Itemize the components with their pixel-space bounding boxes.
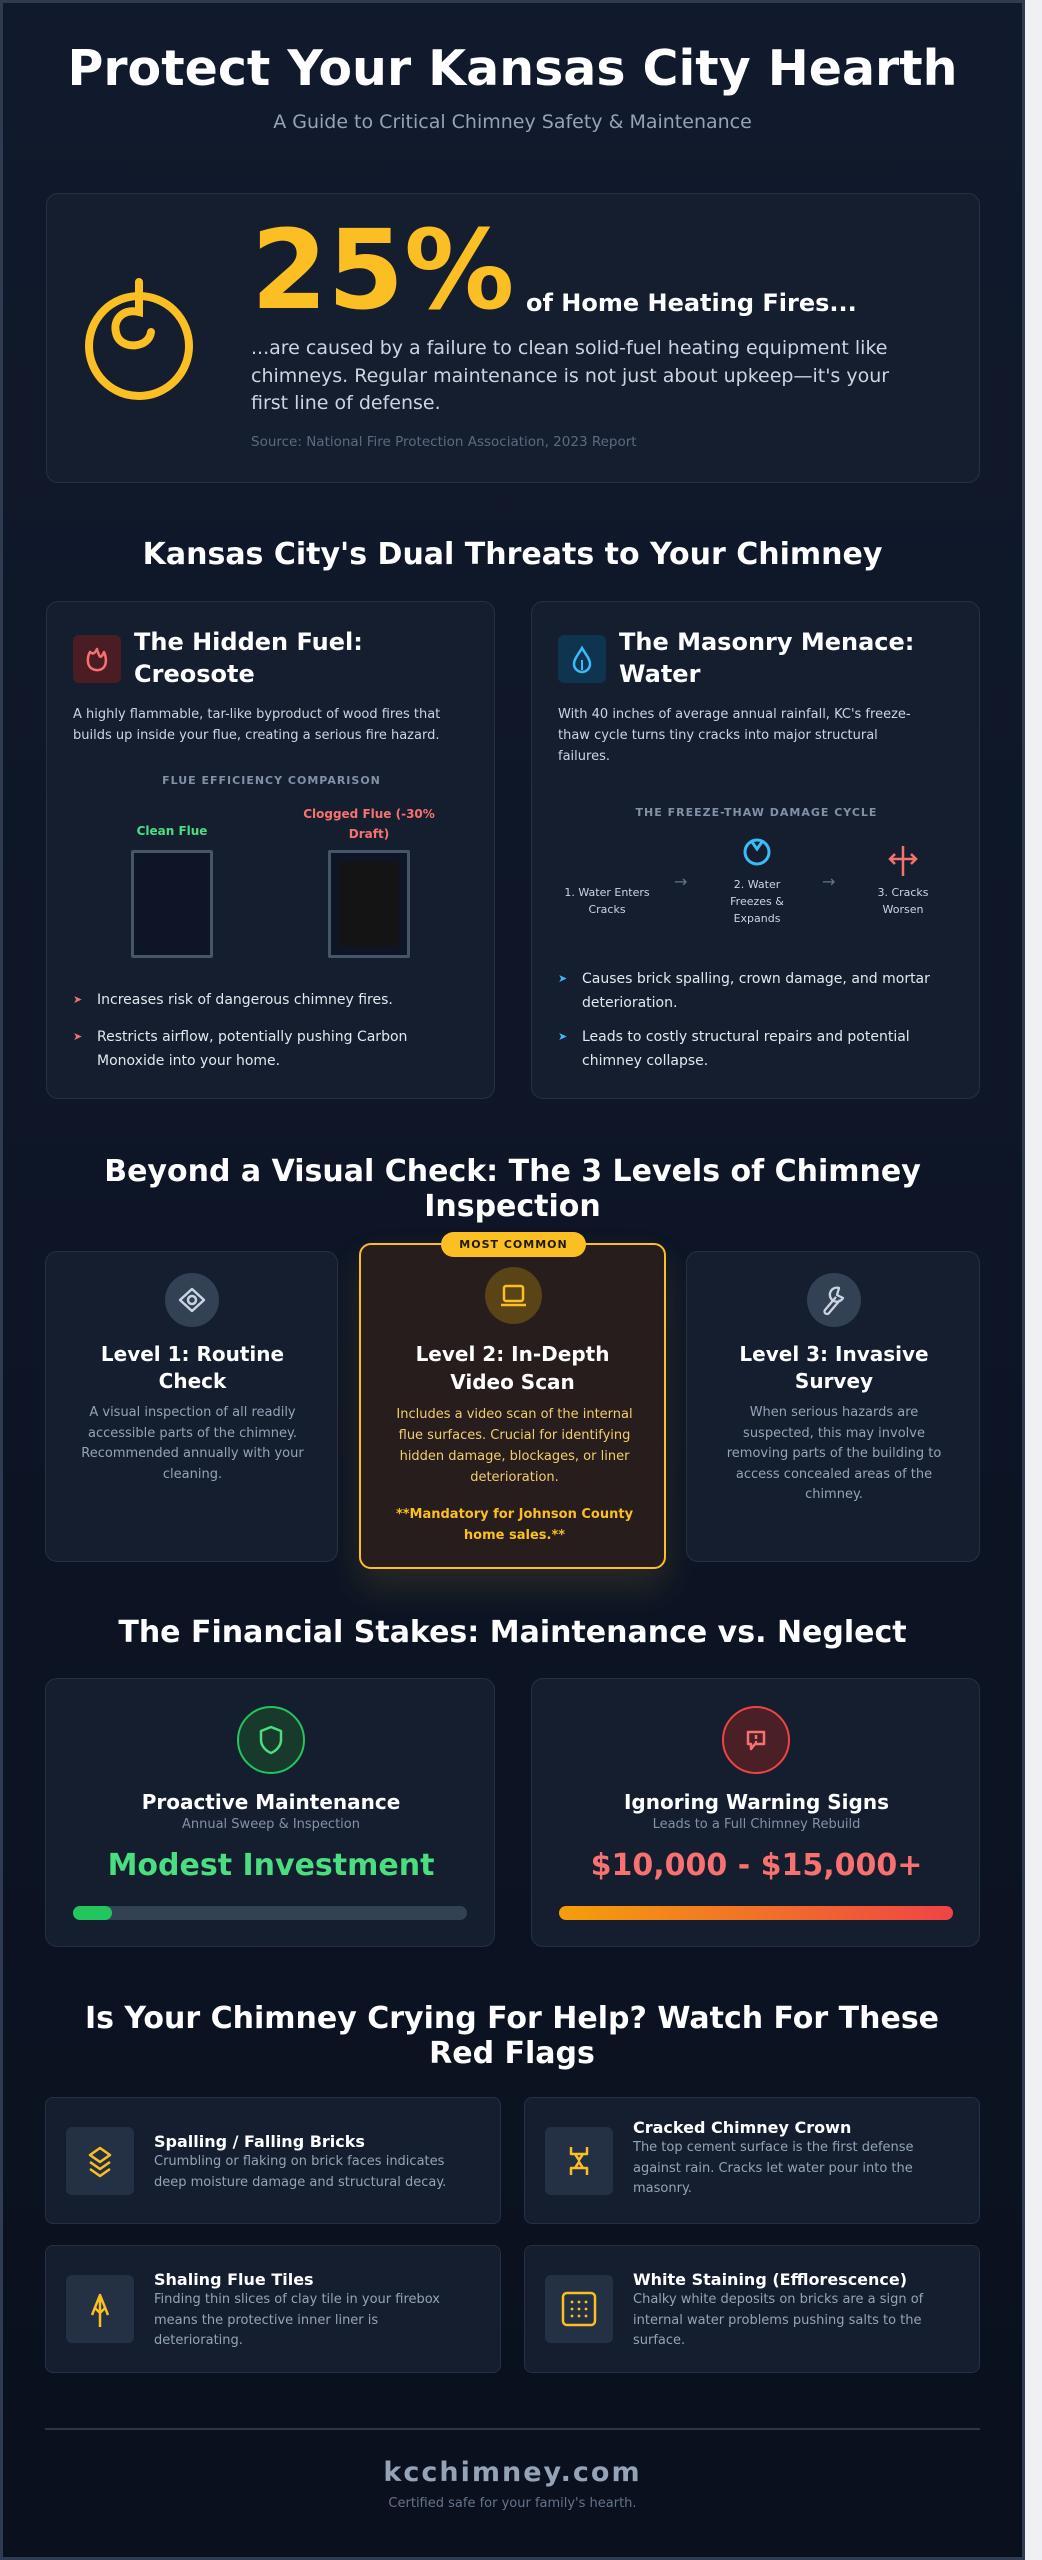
panel: efflorescence xyxy=(524,2245,980,2373)
diagram: freeze-thaw cycle: THE FREEZE-THAW DAMAGE CYCLE xyxy=(636,806,877,819)
panel: proactive maintenance xyxy=(45,1678,495,1947)
stat number: 25% xyxy=(251,206,514,334)
diagram: freeze-thaw cycle xyxy=(564,806,929,925)
panel: ignoring warning signs xyxy=(531,1678,980,1947)
text: White Staining (Efflorescence) xyxy=(633,2270,907,2289)
badge xyxy=(441,1232,586,1257)
panel: cracked crown xyxy=(524,2097,980,2224)
diagram: freeze-thaw cycle: 3. Cracks xyxy=(877,886,929,899)
text: Finding thin slices of clay tile in your firebox means the protective inner liner is deteriorating. xyxy=(154,2292,440,2348)
heading: Creosote xyxy=(134,660,255,688)
badge: MOST COMMON xyxy=(459,1238,568,1251)
bullet list: ➤ xyxy=(558,972,567,985)
bullet list xyxy=(73,992,407,1069)
title: Level 2: In-Depth Video Scan xyxy=(416,1342,609,1394)
icon: eye xyxy=(165,1273,219,1327)
diagram: freeze-thaw cycle: 2. Water xyxy=(734,878,780,891)
text: Cracked Chimney Crown xyxy=(633,2118,851,2137)
icon: layers xyxy=(66,2127,134,2195)
subtitle: A Guide to Critical Chimney Safety & Maintenance xyxy=(273,111,752,133)
text: Spalling / Falling Bricks xyxy=(154,2132,365,2151)
icon: alert bubble xyxy=(722,1706,790,1774)
diagram: freeze-thaw cycle: Freezes & xyxy=(730,895,784,908)
text xyxy=(154,2132,446,2190)
title: Ignoring Warning Signs xyxy=(624,1790,889,1814)
icon: flame xyxy=(73,635,121,683)
heading: inspection levels: Beyond a Visual Check: The 3 Levels of Chimney Inspection xyxy=(104,1154,921,1224)
source: Source: National Fire Protection Association, 2023 Report xyxy=(251,434,637,450)
icon: arrow up xyxy=(66,2275,134,2343)
heading: dual threats: Kansas City's Dual Threats to Your Chimney xyxy=(143,537,882,572)
heading: The Masonry Menace: xyxy=(619,628,914,656)
bar xyxy=(559,1906,953,1920)
footer: tagline: Certified safe for your family's hearth. xyxy=(388,2496,637,2511)
title: Level 3: Invasive Survey xyxy=(739,1342,929,1393)
panel: level 1 xyxy=(45,1251,338,1562)
text: The top cement surface is the first defense against rain. Cracks let water pour into the masonry. xyxy=(633,2140,914,2196)
subtitle: Leads to a Full Chimney Rebuild xyxy=(653,1817,860,1832)
bullet list xyxy=(558,971,930,1069)
bullet list: Leads to costly structural repairs and potential chimney collapse. xyxy=(582,1029,910,1069)
icon: shield xyxy=(237,1706,305,1774)
bullet list: ➤ xyxy=(73,1030,82,1043)
diagram: freeze-thaw cycle: → xyxy=(674,872,687,891)
panel: hero stat xyxy=(46,193,980,483)
text: Shaling Flue Tiles xyxy=(154,2270,314,2289)
subtitle: Annual Sweep & Inspection xyxy=(182,1817,360,1832)
description: When serious hazards are suspected, this may involve removing parts of the building to access concealed areas of the chimney. xyxy=(727,1405,941,1502)
chart: flue comparison: Clogged Flue (-30% Draft) xyxy=(303,807,435,841)
diagram: freeze-thaw cycle: Worsen xyxy=(883,903,923,916)
description: With 40 inches of average annual rainfall, KC's freeze-thaw cycle turns tiny cracks into major structural failures. xyxy=(558,707,911,764)
diagram: freeze-thaw cycle: Expands xyxy=(734,912,780,925)
bullet list: ➤ xyxy=(73,993,82,1006)
icon: laptop xyxy=(485,1267,542,1324)
icon: water drop xyxy=(558,635,606,683)
panel: spalling xyxy=(45,2097,501,2224)
diagram: freeze-thaw cycle: → xyxy=(822,872,835,891)
stat label: of Home Heating Fires... xyxy=(526,289,857,317)
heading: financial stakes: The Financial Stakes: Maintenance vs. Neglect xyxy=(118,1615,907,1650)
description: A visual inspection of all readily accessible parts of the chimney. Recommended annually with your cleaning. xyxy=(81,1405,304,1482)
panel: creosote xyxy=(46,601,495,1099)
title: Proactive Maintenance xyxy=(142,1790,400,1814)
bullet list: Causes brick spalling, crown damage, and mortar deterioration. xyxy=(582,971,930,1011)
value: $10,000 - $15,000+ xyxy=(591,1848,922,1883)
callout: mandatory: **Mandatory for Johnson County home sales.** xyxy=(396,1507,633,1543)
panel: level 2 xyxy=(359,1243,666,1569)
bar xyxy=(73,1906,467,1920)
bullet list: ➤ xyxy=(558,1030,567,1043)
text: Crumbling or flaking on brick faces indicates deep moisture damage and structural decay. xyxy=(154,2154,446,2190)
icon: crown xyxy=(545,2127,613,2195)
heading xyxy=(619,628,914,688)
chart: flue comparison: Clean Flue xyxy=(137,824,207,838)
footer: brand: kcchimney.com xyxy=(383,2457,642,2488)
heading: The Hidden Fuel: xyxy=(134,628,363,656)
icon: wrench xyxy=(807,1273,861,1327)
description: A highly flammable, tar-like byproduct of wood fires that builds up inside your flue, creating a serious fire hazard. xyxy=(73,707,440,743)
heading: red flags: Is Your Chimney Crying For Help? Watch For These Red Flags xyxy=(85,2001,939,2071)
panel: level 3 xyxy=(686,1251,980,1562)
bullet list: Increases risk of dangerous chimney fires. xyxy=(97,992,393,1008)
description: Includes a video scan of the internal flue surfaces. Crucial for identifying hidden damage, blockages, or liner deterioration. xyxy=(396,1407,633,1485)
stat description: ...are caused by a failure to clean solid-fuel heating equipment like chimneys. Regular maintenance is not just about upkeep—it's your first line of defense. xyxy=(251,337,889,414)
chart: flue comparison: FLUE EFFICIENCY COMPARISON xyxy=(162,774,381,787)
heading xyxy=(134,628,363,688)
title: Protect Your Kansas City Hearth xyxy=(67,40,958,97)
heading: Water xyxy=(619,660,700,688)
diagram: freeze-thaw cycle: 1. Water Enters Cracks xyxy=(564,886,650,916)
text: Chalky white deposits on bricks are a sign of internal water problems pushing salts to the surface. xyxy=(633,2292,923,2348)
title: Level 1: Routine Check xyxy=(101,1342,284,1393)
value: Modest Investment xyxy=(108,1848,434,1883)
panel: shaling flue tiles xyxy=(45,2245,501,2373)
icon: flame ring xyxy=(85,278,193,400)
icon: dotted tile xyxy=(545,2275,613,2343)
panel: water xyxy=(531,601,980,1099)
chart: flue comparison xyxy=(131,774,435,958)
bullet list: Restricts airflow, potentially pushing Carbon Monoxide into your home. xyxy=(97,1029,407,1069)
